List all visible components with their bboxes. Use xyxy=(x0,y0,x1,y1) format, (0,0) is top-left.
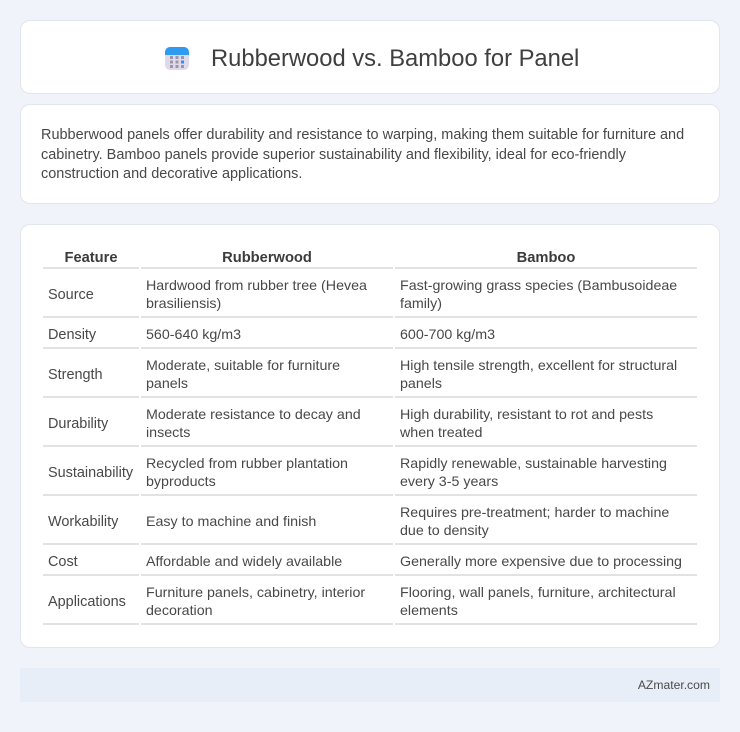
comparison table: Density xyxy=(48,327,96,343)
comparison table: Workability xyxy=(48,514,118,530)
column heading: Feature: Feature xyxy=(64,250,118,266)
comparison table: Furniture panels, cabinetry, interior xyxy=(146,585,365,601)
comparison table: Sustainability xyxy=(48,465,133,481)
comparison table: family) xyxy=(400,296,442,312)
comparison table: panels xyxy=(400,376,442,392)
comparison table: Flooring, wall panels, furniture, architectural xyxy=(400,585,676,601)
comparison table: Easy to machine and finish xyxy=(146,514,316,530)
summary text xyxy=(41,127,684,182)
comparison table: Applications xyxy=(48,594,126,610)
column heading: Bamboo: Bamboo xyxy=(517,250,575,266)
comparison table: Fast-growing grass species (Bambusoideae xyxy=(400,278,677,294)
comparison table: every 3-5 years xyxy=(400,474,498,490)
row: Workability xyxy=(48,505,669,539)
comparison table: when treated xyxy=(400,425,482,441)
column heading: Rubberwood: Rubberwood xyxy=(222,250,312,266)
comparison table: brasiliensis) xyxy=(146,296,221,312)
panel: title card xyxy=(20,20,720,94)
row: Density xyxy=(48,327,495,343)
comparison table: Source xyxy=(48,287,94,303)
footer bar xyxy=(20,668,720,702)
comparison table: Moderate resistance to decay and xyxy=(146,407,361,423)
row: Applications xyxy=(48,585,676,619)
summary text: Rubberwood panels offer durability and resistance to warping, making them suitable for furniture and xyxy=(41,127,684,143)
title: Rubberwood vs. Bamboo for Panel xyxy=(211,44,579,72)
comparison table: 560-640 kg/m3 xyxy=(146,327,241,343)
panel: summary card xyxy=(20,104,720,204)
row: Cost xyxy=(48,554,682,570)
comparison table: Cost xyxy=(48,554,78,570)
comparison table: elements xyxy=(400,603,458,619)
comparison table: Recycled from rubber plantation xyxy=(146,456,348,472)
summary text: construction and decorative applications. xyxy=(41,166,302,182)
footer source text: AZmater.com xyxy=(638,678,710,692)
comparison table: decoration xyxy=(146,603,213,619)
comparison table: High tensile strength, excellent for structural xyxy=(400,358,677,374)
panel: comparison table card xyxy=(20,224,720,648)
comparison table: Durability xyxy=(48,416,108,432)
comparison table: panels xyxy=(146,376,188,392)
row: Sustainability xyxy=(48,456,667,490)
row: Source xyxy=(48,278,677,312)
row: Strength xyxy=(48,358,677,392)
comparison table: 600-700 kg/m3 xyxy=(400,327,495,343)
comparison table: Moderate, suitable for furniture xyxy=(146,358,340,374)
comparison table: Generally more expensive due to processing xyxy=(400,554,682,570)
comparison table: due to density xyxy=(400,523,489,539)
comparison table: Hardwood from rubber tree (Hevea xyxy=(146,278,367,294)
comparison table: Affordable and widely available xyxy=(146,554,342,570)
row: Durability xyxy=(48,407,653,441)
comparison table: Rapidly renewable, sustainable harvesting xyxy=(400,456,667,472)
comparison table: byproducts xyxy=(146,474,216,490)
summary text: cabinetry. Bamboo panels provide superior sustainability and flexibility, ideal for eco-friendly xyxy=(41,146,626,162)
icon: calendar xyxy=(165,47,189,70)
comparison table: Strength xyxy=(48,367,103,383)
comparison table: Requires pre-treatment; harder to machine xyxy=(400,505,669,521)
comparison table: insects xyxy=(146,425,190,441)
comparison table: High durability, resistant to rot and pests xyxy=(400,407,653,423)
